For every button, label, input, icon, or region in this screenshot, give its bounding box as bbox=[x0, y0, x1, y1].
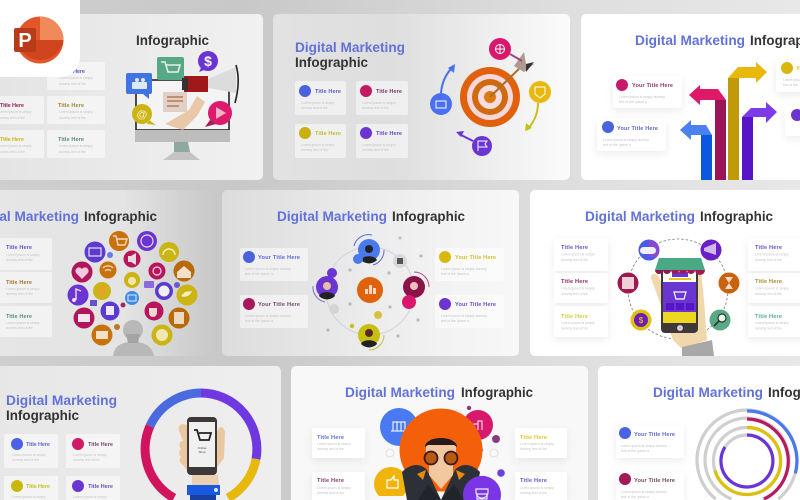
item: purple: Lorem Ipsum is simply bbox=[362, 143, 396, 147]
icon: mail bbox=[618, 272, 638, 294]
icon: coin: $ bbox=[639, 316, 644, 325]
avatar: crimson bbox=[403, 272, 429, 298]
item: teal right: dummy text of the bbox=[755, 326, 782, 330]
item: blue: Lorem Ipsum is simply dummy bbox=[245, 267, 291, 271]
panel: slide 6, mobile shop bbox=[530, 190, 800, 356]
item: crimson: text of the Ipsum a bbox=[619, 100, 647, 104]
item: yellow: Lorem Ipsum is simply dummy bbox=[441, 267, 487, 271]
item: yellow: Lorem Ipsum is simply bbox=[520, 442, 554, 446]
item: yellow: text of the bbox=[783, 83, 798, 87]
item: yellow bbox=[776, 60, 800, 92]
item: orange right: Lorem Ipsum is simply bbox=[755, 286, 789, 290]
icon: coin bbox=[630, 310, 652, 330]
item: purple: dummy text of the bbox=[362, 148, 389, 152]
item: purple bbox=[0, 238, 52, 270]
item: purple bbox=[435, 295, 504, 328]
item: blue: text of the Ipsum a bbox=[603, 143, 631, 147]
item: slide 1 top right bbox=[47, 62, 105, 90]
icon: shopping cart bubble bbox=[157, 57, 184, 80]
arrow: purple bbox=[742, 102, 777, 180]
item: purple left bbox=[554, 238, 608, 271]
item: blue: Lorem Ipsum is simply bbox=[317, 442, 351, 446]
item: slide 1 bottom right: Lorem Ipsum is simply bbox=[59, 144, 93, 148]
phone with hand bbox=[179, 417, 225, 500]
item: blue: Title Here bbox=[26, 442, 50, 448]
panel: slide 5, team network bbox=[222, 190, 519, 356]
item: yellow left: Title Here bbox=[561, 314, 588, 320]
item: yellow: dummy text of the bbox=[301, 148, 328, 152]
PowerPoint logo tile bbox=[0, 0, 80, 77]
item: teal: Lorem Ipsum is simply bbox=[6, 321, 40, 325]
icon: thumb circle bbox=[374, 467, 408, 496]
panel: slide 8, binoculars bbox=[291, 366, 588, 500]
item: crimson: Your Title Here bbox=[632, 83, 673, 89]
item: crimson bbox=[66, 434, 120, 468]
item: purple right: Lorem Ipsum is simply bbox=[755, 252, 789, 256]
item: blue: Lorem Ipsum is simply bbox=[301, 101, 335, 105]
item: blue: Lorem Ipsum is simply dummy bbox=[603, 138, 649, 142]
item: blue bbox=[240, 248, 308, 281]
PowerPoint logo tile: P bbox=[18, 30, 32, 52]
item: yellow: Title Here bbox=[520, 435, 547, 441]
avatar: yellow bbox=[358, 324, 384, 350]
panel: slide 7, online shop ring bbox=[0, 366, 281, 500]
item: yellow bbox=[4, 476, 58, 500]
item: teal right: Lorem Ipsum is simply bbox=[755, 321, 789, 325]
item: orange right: Title Here bbox=[755, 279, 782, 285]
avatar: purple bbox=[313, 276, 338, 302]
item: crimson left: Lorem Ipsum is simply bbox=[561, 286, 595, 290]
item: blue bbox=[295, 81, 346, 115]
item: purple bbox=[785, 106, 800, 136]
item: blue: Your Title Here bbox=[617, 126, 658, 132]
item: crimson: Lorem Ipsum is simply dummy bbox=[245, 314, 291, 318]
icon: badge node with yellow arrow bbox=[525, 81, 551, 131]
phone bbox=[655, 258, 705, 333]
item: purple right: Title Here bbox=[755, 245, 782, 251]
icon: store circle bbox=[463, 476, 501, 500]
item: yellow bbox=[515, 428, 567, 458]
item: purple: Your Title Here bbox=[455, 302, 496, 308]
item: blue: text of the Ipsum a bbox=[245, 272, 273, 276]
panel: slide 3, arrows bbox=[581, 14, 800, 180]
item: crimson left: Title Here bbox=[561, 279, 588, 285]
item: purple bbox=[515, 472, 567, 500]
item: blue: dummy text of the bbox=[317, 447, 344, 451]
item: yellow: Lorem Ipsum is simply bbox=[12, 495, 46, 499]
item: slide 1 middle right: Title Here bbox=[58, 103, 84, 109]
heading: slide 5: Infographic bbox=[392, 209, 465, 224]
panel: slide 1, marketing monitor bbox=[0, 14, 263, 180]
panel: slide 2, target bbox=[273, 14, 570, 180]
heading: slide 1 bbox=[0, 33, 209, 48]
item: slide 1 top right: Title Here bbox=[61, 69, 85, 75]
item: orange: dummy text of the bbox=[6, 292, 33, 296]
icon: dollar bubble: $ bbox=[204, 53, 212, 69]
item: orange: Lorem Ipsum is simply bbox=[6, 287, 40, 291]
item: purple left: dummy text of the bbox=[561, 258, 588, 262]
item: blue bbox=[4, 434, 58, 468]
icon: at sign bubble: @ bbox=[137, 109, 148, 121]
figure with binoculars bbox=[400, 408, 482, 500]
item: teal bbox=[0, 306, 52, 337]
item: crimson: Title Here bbox=[88, 442, 113, 448]
item: blue bbox=[312, 428, 365, 458]
icon: megaphone bbox=[182, 65, 238, 103]
hand and sleeve bbox=[651, 266, 714, 356]
item: yellow bbox=[295, 124, 346, 158]
heading: slide 5 bbox=[277, 209, 465, 224]
item: crimson bbox=[356, 81, 408, 115]
item: yellow: Title Here bbox=[315, 131, 341, 137]
item: slide 1 middle left bbox=[0, 96, 44, 124]
heading: slide 1: Infographic bbox=[136, 33, 209, 48]
item: teal: dummy text of the bbox=[6, 326, 33, 330]
item: slide 1 middle right: dummy text of the bbox=[59, 116, 86, 120]
icon: briefcase node with blue arrow bbox=[430, 64, 455, 115]
item: purple: Title Here bbox=[520, 478, 547, 484]
item: purple: Lorem Ipsum is simply bbox=[6, 253, 40, 257]
item: purple right: dummy text of the bbox=[755, 258, 782, 262]
item: crimson: Title Here bbox=[317, 478, 344, 484]
item: slide 1 middle left: Title Here bbox=[0, 103, 24, 109]
item: blue: Title Here bbox=[315, 89, 341, 95]
heading: slide 4 bbox=[0, 209, 157, 224]
heading: slide 2: Infographic bbox=[295, 55, 368, 70]
item: teal right bbox=[748, 306, 800, 337]
item: crimson: Lorem Ipsum is simply dummy bbox=[619, 95, 665, 99]
item: crimson: Your Title Here bbox=[258, 302, 300, 308]
target bbox=[460, 52, 534, 127]
item: teal: Title Here bbox=[6, 314, 32, 320]
item: purple left: Title Here bbox=[561, 245, 588, 251]
item: blue: dummy text of the bbox=[301, 106, 328, 110]
panel: slide 4, icon cloud bbox=[0, 190, 211, 356]
item: crimson: Lorem Ipsum is simply bbox=[362, 101, 396, 105]
panel: slide 9, concentric rings bbox=[598, 366, 800, 500]
heading: slide 5: Digital Marketing bbox=[277, 209, 387, 224]
item: purple: text of the Ipsum a bbox=[441, 319, 469, 323]
icon: chart circle bbox=[463, 410, 493, 440]
heading: slide 6 bbox=[585, 209, 773, 224]
item: slide 1 bottom right: Title Here bbox=[58, 137, 84, 143]
monitor illustration bbox=[135, 80, 230, 160]
item: crimson bbox=[240, 295, 308, 328]
icon: megaphone bbox=[700, 240, 722, 260]
heading: slide 3 bbox=[635, 33, 800, 48]
heading: slide 8: Infographic bbox=[461, 385, 533, 400]
icon: center chart bbox=[357, 277, 383, 303]
item: crimson: dummy text of the bbox=[317, 491, 344, 495]
item: yellow bbox=[435, 248, 504, 281]
concentric rings chart bbox=[697, 410, 797, 499]
item: yellow: text of the Ipsum a bbox=[441, 272, 469, 276]
heading: slide 9: Digital Marketing bbox=[653, 385, 763, 400]
heading: slide 6: Digital Marketing bbox=[585, 209, 695, 224]
item: purple: Lorem Ipsum is simply bbox=[520, 486, 554, 490]
item: purple: Title Here bbox=[6, 245, 32, 251]
item: blue: Lorem Ipsum is simply dummy bbox=[621, 444, 667, 448]
item: slide 1 top right: dummy text of the bbox=[59, 82, 86, 86]
item: yellow left bbox=[554, 306, 608, 337]
icon cloud bbox=[68, 231, 198, 346]
item: crimson: Lorem Ipsum is simply bbox=[73, 453, 107, 457]
item: crimson: Title Here bbox=[376, 89, 402, 95]
item: purple: dummy text of the bbox=[6, 258, 33, 262]
icon: person silhouette bbox=[113, 320, 154, 356]
heading: slide 4: Infographic bbox=[84, 209, 157, 224]
item: yellow: Your Title Here bbox=[455, 255, 496, 261]
item: purple: Lorem Ipsum is simply bbox=[73, 495, 107, 499]
arrow: crimson bbox=[689, 85, 726, 180]
item: yellow: Lorem Ipsum is simply bbox=[301, 143, 335, 147]
item: yellow left: dummy text of the bbox=[561, 326, 588, 330]
item: orange right: dummy text of the bbox=[755, 292, 782, 296]
item: slide 1 bottom right: dummy text of the bbox=[59, 150, 86, 154]
item: crimson: text of the Ipsum a bbox=[245, 319, 273, 323]
item: crimson bbox=[613, 76, 682, 108]
item: yellow: dummy text of the bbox=[520, 447, 547, 451]
icon: chat bbox=[638, 240, 660, 260]
heading: slide 2 bbox=[295, 40, 405, 70]
item: blue: Title Here bbox=[317, 435, 344, 441]
item: crimson bbox=[616, 472, 684, 500]
icon: hourglass bbox=[718, 272, 740, 294]
item: purple bbox=[356, 124, 408, 158]
item: blue: Your Title Here bbox=[634, 432, 675, 438]
item: slide 1 bottom left bbox=[0, 130, 44, 158]
dashed ring bbox=[628, 239, 728, 339]
item: slide 1 bottom right bbox=[47, 130, 105, 158]
item: crimson: Lorem Ipsum is simply bbox=[317, 486, 351, 490]
item: crimson: Your Title Here bbox=[634, 478, 675, 484]
item: yellow left: Lorem Ipsum is simply bbox=[561, 321, 595, 325]
icon: at sign bubble bbox=[132, 104, 156, 125]
item: blue: Your Title Here bbox=[258, 255, 300, 261]
item: blue: dummy text of the bbox=[12, 458, 39, 462]
item: purple: dummy text of the bbox=[520, 491, 547, 495]
avatar: blue bbox=[354, 235, 384, 265]
item: purple bbox=[66, 476, 120, 500]
item: yellow: Title Here bbox=[26, 484, 50, 490]
network diagram bbox=[313, 235, 429, 350]
icon: dollar bubble bbox=[198, 51, 218, 72]
item: purple: Lorem Ipsum is simply dummy bbox=[441, 314, 487, 318]
item: purple: Title Here bbox=[88, 484, 113, 490]
item: crimson: text of the Ipsum a bbox=[621, 495, 649, 499]
item: teal right: Title Here bbox=[755, 314, 782, 320]
item: orange: Title Here bbox=[6, 280, 32, 286]
heading: slide 8 bbox=[345, 385, 533, 400]
item: blue bbox=[597, 119, 666, 151]
ring chart bbox=[145, 393, 257, 498]
item: orange right bbox=[748, 273, 800, 303]
phone with hand: Shop bbox=[198, 450, 206, 454]
icon: globe node bbox=[489, 38, 522, 61]
decorative dots and faint icons bbox=[386, 406, 505, 477]
item: slide 1 bottom left: Title Here bbox=[0, 137, 24, 143]
item: purple left: Lorem Ipsum is simply bbox=[561, 252, 595, 256]
heading: slide 7 bbox=[6, 393, 117, 423]
arrow: blue bbox=[680, 120, 712, 180]
item: crimson: Lorem Ipsum is simply dummy bbox=[621, 490, 667, 494]
icon: bank circle bbox=[380, 408, 418, 446]
item: crimson bbox=[312, 472, 365, 500]
item: blue bbox=[616, 425, 684, 458]
heading: slide 7: Digital Marketing bbox=[6, 393, 117, 408]
icon: play bubble bbox=[205, 101, 232, 127]
heading: slide 3: Digital Marketing bbox=[635, 33, 745, 48]
item: crimson left: dummy text of the bbox=[561, 292, 588, 296]
item: purple: Title Here bbox=[376, 131, 402, 137]
icon: flag node with purple arrow bbox=[456, 131, 492, 156]
item: blue: text of the Ipsum a bbox=[621, 449, 649, 453]
item: crimson: dummy text of the bbox=[362, 106, 389, 110]
heading: slide 8: Digital Marketing bbox=[345, 385, 455, 400]
icon: video camera bubble bbox=[126, 73, 152, 99]
arrow: yellow bbox=[728, 62, 767, 180]
item: slide 1 top right: Lorem Ipsum is simply bbox=[59, 76, 93, 80]
phone with hand: Online bbox=[198, 446, 207, 450]
icon: magnifier bbox=[710, 310, 730, 330]
item: blue: Lorem Ipsum is simply bbox=[12, 453, 46, 457]
heading: slide 6: Infographic bbox=[700, 209, 773, 224]
item: slide 1 middle right: Lorem Ipsum is simply bbox=[59, 110, 93, 114]
item: orange bbox=[0, 272, 52, 303]
item: crimson left bbox=[554, 273, 608, 303]
heading: slide 7: Infographic bbox=[6, 408, 79, 423]
heading: slide 2: Digital Marketing bbox=[295, 40, 405, 55]
item: crimson: dummy text of the bbox=[73, 458, 100, 462]
item: slide 1 middle right bbox=[47, 96, 105, 124]
item: purple right bbox=[748, 238, 800, 271]
